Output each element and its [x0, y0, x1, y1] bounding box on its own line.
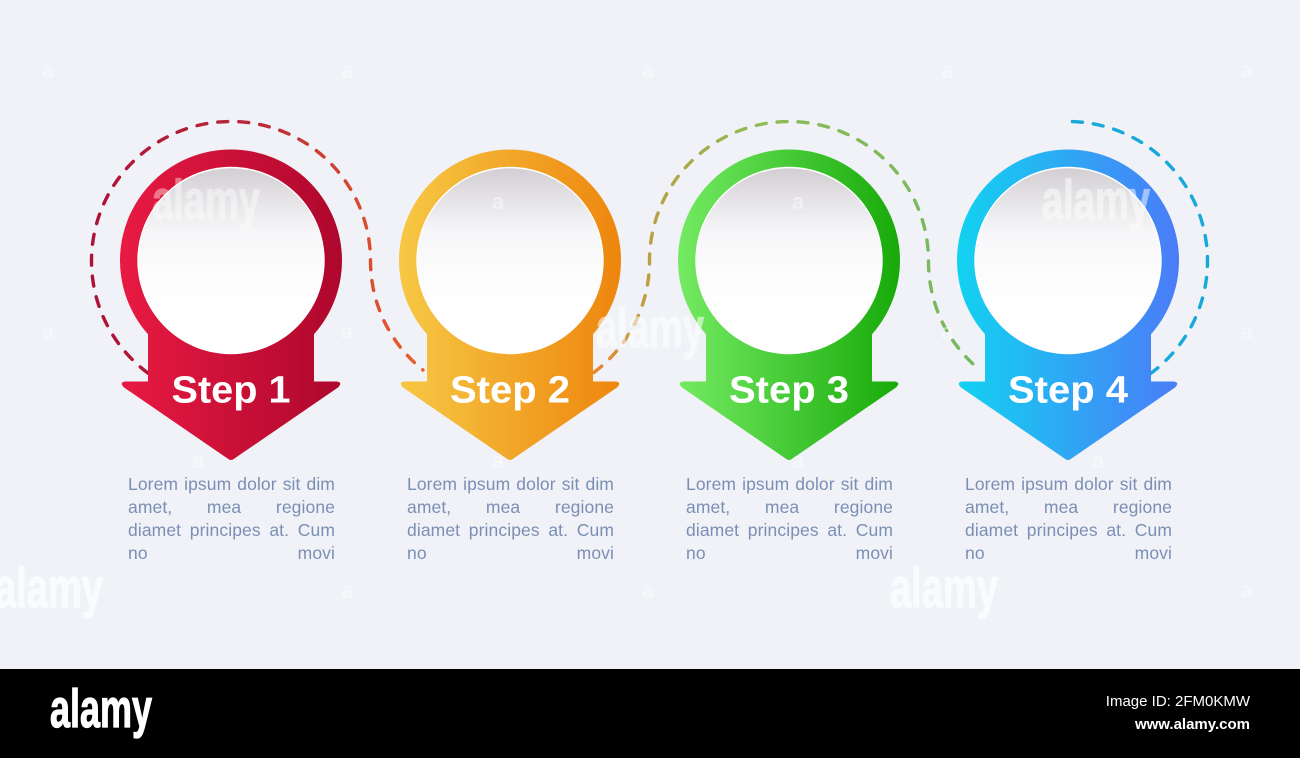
watermarks: a: [1092, 448, 1105, 473]
dashed connector: step 2 to step 4 via step 3: [594, 122, 980, 372]
text block: step 2: diamet principes at. Cum: [407, 520, 614, 540]
text block: step 1: no movi: [128, 543, 335, 563]
footer bar: Image ID: 2FM0KMW: [1106, 693, 1251, 710]
step 2 pointer: [399, 149, 621, 460]
step 1 pointer: [120, 149, 342, 460]
watermarks: a: [941, 319, 954, 344]
watermarks: a: [792, 448, 805, 473]
dashed connector: step 4 arc: [1068, 122, 1208, 374]
watermarks: a: [341, 58, 354, 83]
step 1 pointer: Step 1: [172, 370, 290, 412]
text block: step 3: Lorem ipsum dolor sit dim: [686, 474, 893, 494]
text block: step 1: amet, mea regione: [128, 497, 335, 517]
footer bar: [0, 669, 1300, 758]
watermarks: a: [492, 448, 505, 473]
text block: step 4: [965, 474, 1172, 563]
text block: step 2: amet, mea regione: [407, 497, 614, 517]
watermarks: a: [642, 58, 655, 83]
watermarks: alamy: [890, 556, 998, 619]
step 4 pointer: Step 4: [1008, 370, 1128, 412]
footer bar: alamy: [50, 679, 152, 739]
watermarks: a: [1241, 578, 1254, 603]
watermarks: a: [642, 578, 655, 603]
step 4 pointer: [957, 149, 1179, 460]
text block: step 3: amet, mea regione: [686, 497, 893, 517]
watermarks: a: [192, 448, 205, 473]
dashed connector: step 1 to step 2: [92, 121, 423, 373]
text block: step 3: diamet principes at. Cum: [686, 520, 893, 540]
watermarks: a: [941, 58, 954, 83]
watermarks: a: [42, 58, 55, 83]
text block: step 2: Lorem ipsum dolor sit dim: [407, 474, 614, 494]
watermarks: a: [341, 578, 354, 603]
watermarks: a: [792, 189, 805, 214]
text block: step 4: no movi: [965, 543, 1172, 563]
watermarks: a: [1241, 58, 1254, 83]
watermarks: a: [42, 319, 55, 344]
text block: step 2: [407, 474, 614, 563]
text block: step 4: amet, mea regione: [965, 497, 1172, 517]
text block: step 1: Lorem ipsum dolor sit dim: [128, 474, 335, 494]
watermarks: [0, 58, 1254, 619]
watermarks: alamy: [152, 168, 260, 231]
footer bar: www.alamy.com: [1134, 716, 1250, 733]
step 2 pointer: Step 2: [450, 370, 570, 412]
text block: step 3: [686, 474, 893, 563]
watermarks: a: [492, 189, 505, 214]
text block: step 4: Lorem ipsum dolor sit dim: [965, 474, 1172, 494]
step 3 pointer: Step 3: [729, 370, 849, 412]
text block: step 2: no movi: [407, 543, 614, 563]
step 3 pointer: [678, 149, 900, 460]
text block: step 3: no movi: [686, 543, 893, 563]
watermarks: alamy: [596, 296, 704, 359]
text block: step 1: [128, 474, 335, 563]
watermarks: a: [1241, 319, 1254, 344]
text block: step 1: diamet principes at. Cum: [128, 520, 335, 540]
text block: step 4: diamet principes at. Cum: [965, 520, 1172, 540]
watermarks: alamy: [1042, 168, 1150, 231]
watermarks: a: [341, 319, 354, 344]
